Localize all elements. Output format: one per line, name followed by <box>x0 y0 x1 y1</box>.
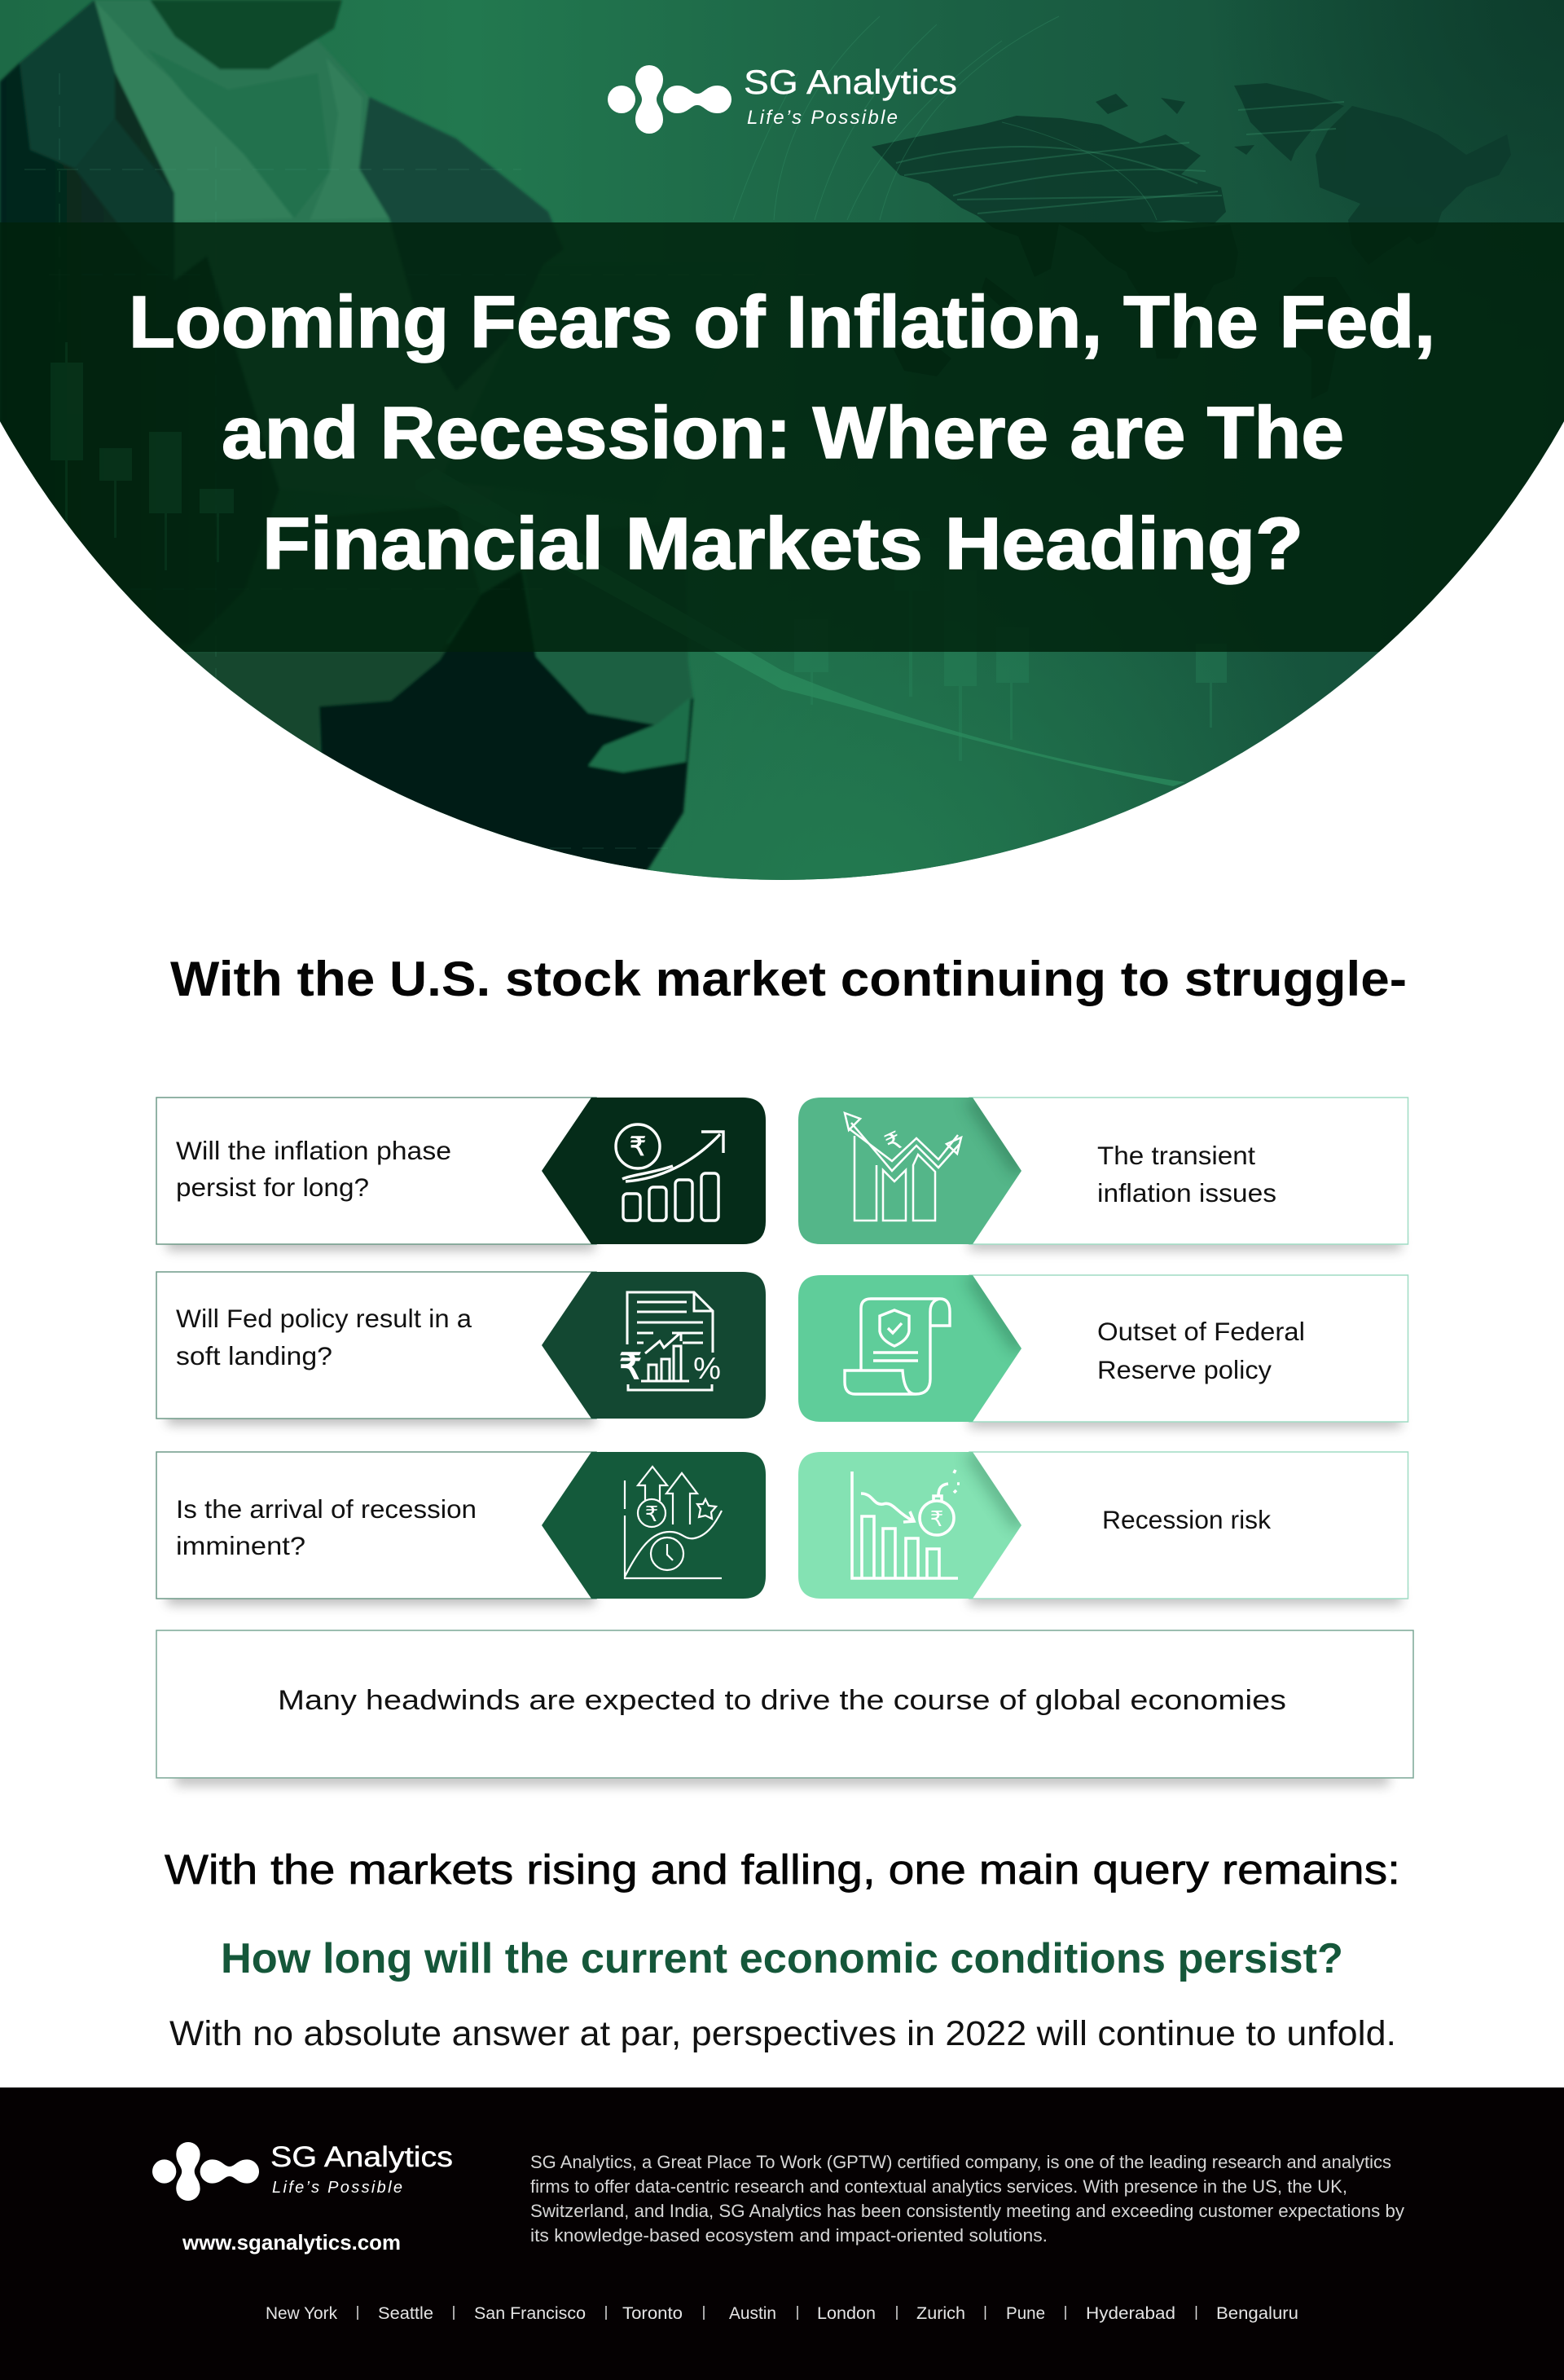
company description: its knowledge-based ecosystem and impact-oriented solutions. <box>530 2225 1048 2246</box>
person: sleeve and hand <box>183 505 481 652</box>
logo: SG Analytics footer: Life’s Possible <box>272 2179 402 2197</box>
office cities: Austin <box>729 2304 776 2323</box>
icon: report with chart <box>619 1292 721 1390</box>
heading: stock market struggle: With the U.S. stock market continuing to struggle- <box>170 952 1407 1006</box>
office cities: Zurich <box>916 2304 965 2323</box>
logo: SG Analytics footer: SG Analytics <box>270 2141 453 2173</box>
office cities: Seattle <box>378 2304 433 2323</box>
icon: rupee growth bars: ₹ <box>630 1132 646 1161</box>
panel: question 1 inflation phase <box>156 1098 766 1251</box>
person: collar <box>94 0 294 222</box>
panel: answer 3 recession risk <box>798 1452 1408 1605</box>
icon: policy scroll with shield <box>845 1299 950 1394</box>
panel: answer 1 transient inflation: inflation issues <box>1097 1178 1276 1208</box>
icon: falling and rising bars <box>845 1113 961 1221</box>
title: Looming Fears of Inflation, The Fed, <box>129 282 1435 363</box>
network lines over map <box>733 16 1344 220</box>
title band <box>0 222 1564 652</box>
panel: answer 2 federal reserve <box>798 1275 1408 1428</box>
icon: rupee growth bars <box>616 1124 723 1221</box>
icon: falling bars and bomb: ₹ <box>930 1507 943 1531</box>
office cities: San Francisco <box>474 2304 586 2323</box>
logo: SG Analytics header: SG Analytics <box>744 63 957 101</box>
person: beard <box>150 0 342 69</box>
hero: circular photo banner <box>0 0 1564 896</box>
icon: arrows coin clock curve <box>625 1467 722 1578</box>
panel: question 1 inflation phase: Will the inflation phase <box>176 1136 451 1165</box>
trend curve <box>714 652 1184 786</box>
person: shirt <box>93 0 553 222</box>
icon: report with chart: % <box>693 1352 721 1386</box>
panel: question 1 inflation phase: persist for long? <box>176 1172 369 1202</box>
logo: SG Analytics footer <box>152 2141 453 2201</box>
candlestick chart left <box>51 342 234 570</box>
logo: SG Analytics header: Life’s Possible <box>747 107 898 129</box>
dashed grid <box>24 73 664 849</box>
office cities <box>266 2304 1298 2323</box>
person: right jacket <box>358 96 554 222</box>
panel: question 2 fed policy <box>156 1272 766 1425</box>
candlestick chart right <box>909 652 1227 740</box>
logo: SG Analytics header <box>608 63 957 134</box>
website link: www.sganalytics.com <box>182 2230 401 2255</box>
title: and Recession: Where are The <box>222 393 1344 474</box>
footer background <box>0 2087 1564 2380</box>
person: lower sleeve <box>122 644 456 831</box>
panel: answer 1 transient inflation: The transient <box>1097 1141 1255 1170</box>
panel: answer 3 recession risk: Recession risk <box>1102 1505 1271 1534</box>
icon: falling and rising bars: ₹ <box>881 1127 907 1158</box>
company description: SG Analytics, a Great Place To Work (GPTW) certified company, is one of the leading research and analytics <box>530 2152 1391 2172</box>
person: left jacket <box>0 0 279 652</box>
office cities: Pune <box>1006 2304 1045 2323</box>
panel: answer 1 transient inflation <box>798 1098 1408 1251</box>
person: dark coat <box>319 570 693 896</box>
panel: question 2 fed policy: Will Fed policy result in a <box>176 1304 472 1333</box>
office cities: Bengaluru <box>1216 2304 1298 2323</box>
person figure <box>0 0 695 870</box>
panel: question 3 recession: Is the arrival of recession <box>176 1494 477 1524</box>
callout: headwinds: Many headwinds are expected to drive the course of global economies <box>278 1685 1286 1716</box>
person: tablet <box>440 265 763 505</box>
office cities: New York <box>266 2304 337 2323</box>
title: Financial Markets Heading? <box>262 504 1303 585</box>
title <box>129 282 1435 585</box>
panel: answer 2 federal reserve: Outset of Federal <box>1097 1317 1305 1346</box>
callout: headwinds <box>156 1630 1413 1786</box>
person: chest <box>174 80 293 215</box>
company description: firms to offer data-centric research and contextual analytics services. With presence in the US, the UK, <box>530 2176 1347 2197</box>
text: no absolute answer: With no absolute answer at par, perspectives in 2022 will continue to unfold. <box>169 2014 1396 2053</box>
question: how long: How long will the current economic conditions persist? <box>221 1935 1343 1982</box>
panel: question 3 recession: imminent? <box>176 1531 305 1560</box>
company description <box>530 2152 1404 2246</box>
icon: report with chart: ₹ <box>619 1347 642 1387</box>
icon: falling bars and bomb <box>852 1470 960 1578</box>
text: markets rising and falling: With the markets rising and falling, one main query remains: <box>165 1846 1400 1893</box>
person: left lapel <box>20 0 115 169</box>
icon: arrows coin clock curve: ₹ <box>645 1502 658 1526</box>
person: pocket flap <box>588 697 691 772</box>
office cities: Toronto <box>622 2304 683 2323</box>
company description: Switzerland, and India, SG Analytics has been consistently meeting and exceeding customer expectations by <box>530 2201 1404 2221</box>
panel: answer 2 federal reserve: Reserve policy <box>1097 1355 1272 1384</box>
person: hand in pocket <box>534 652 693 726</box>
panel: question 2 fed policy: soft landing? <box>176 1341 332 1370</box>
world map <box>872 83 1510 222</box>
office cities: Hyderabad <box>1086 2304 1175 2323</box>
office cities: London <box>817 2304 876 2323</box>
panel: question 3 recession <box>156 1452 766 1605</box>
